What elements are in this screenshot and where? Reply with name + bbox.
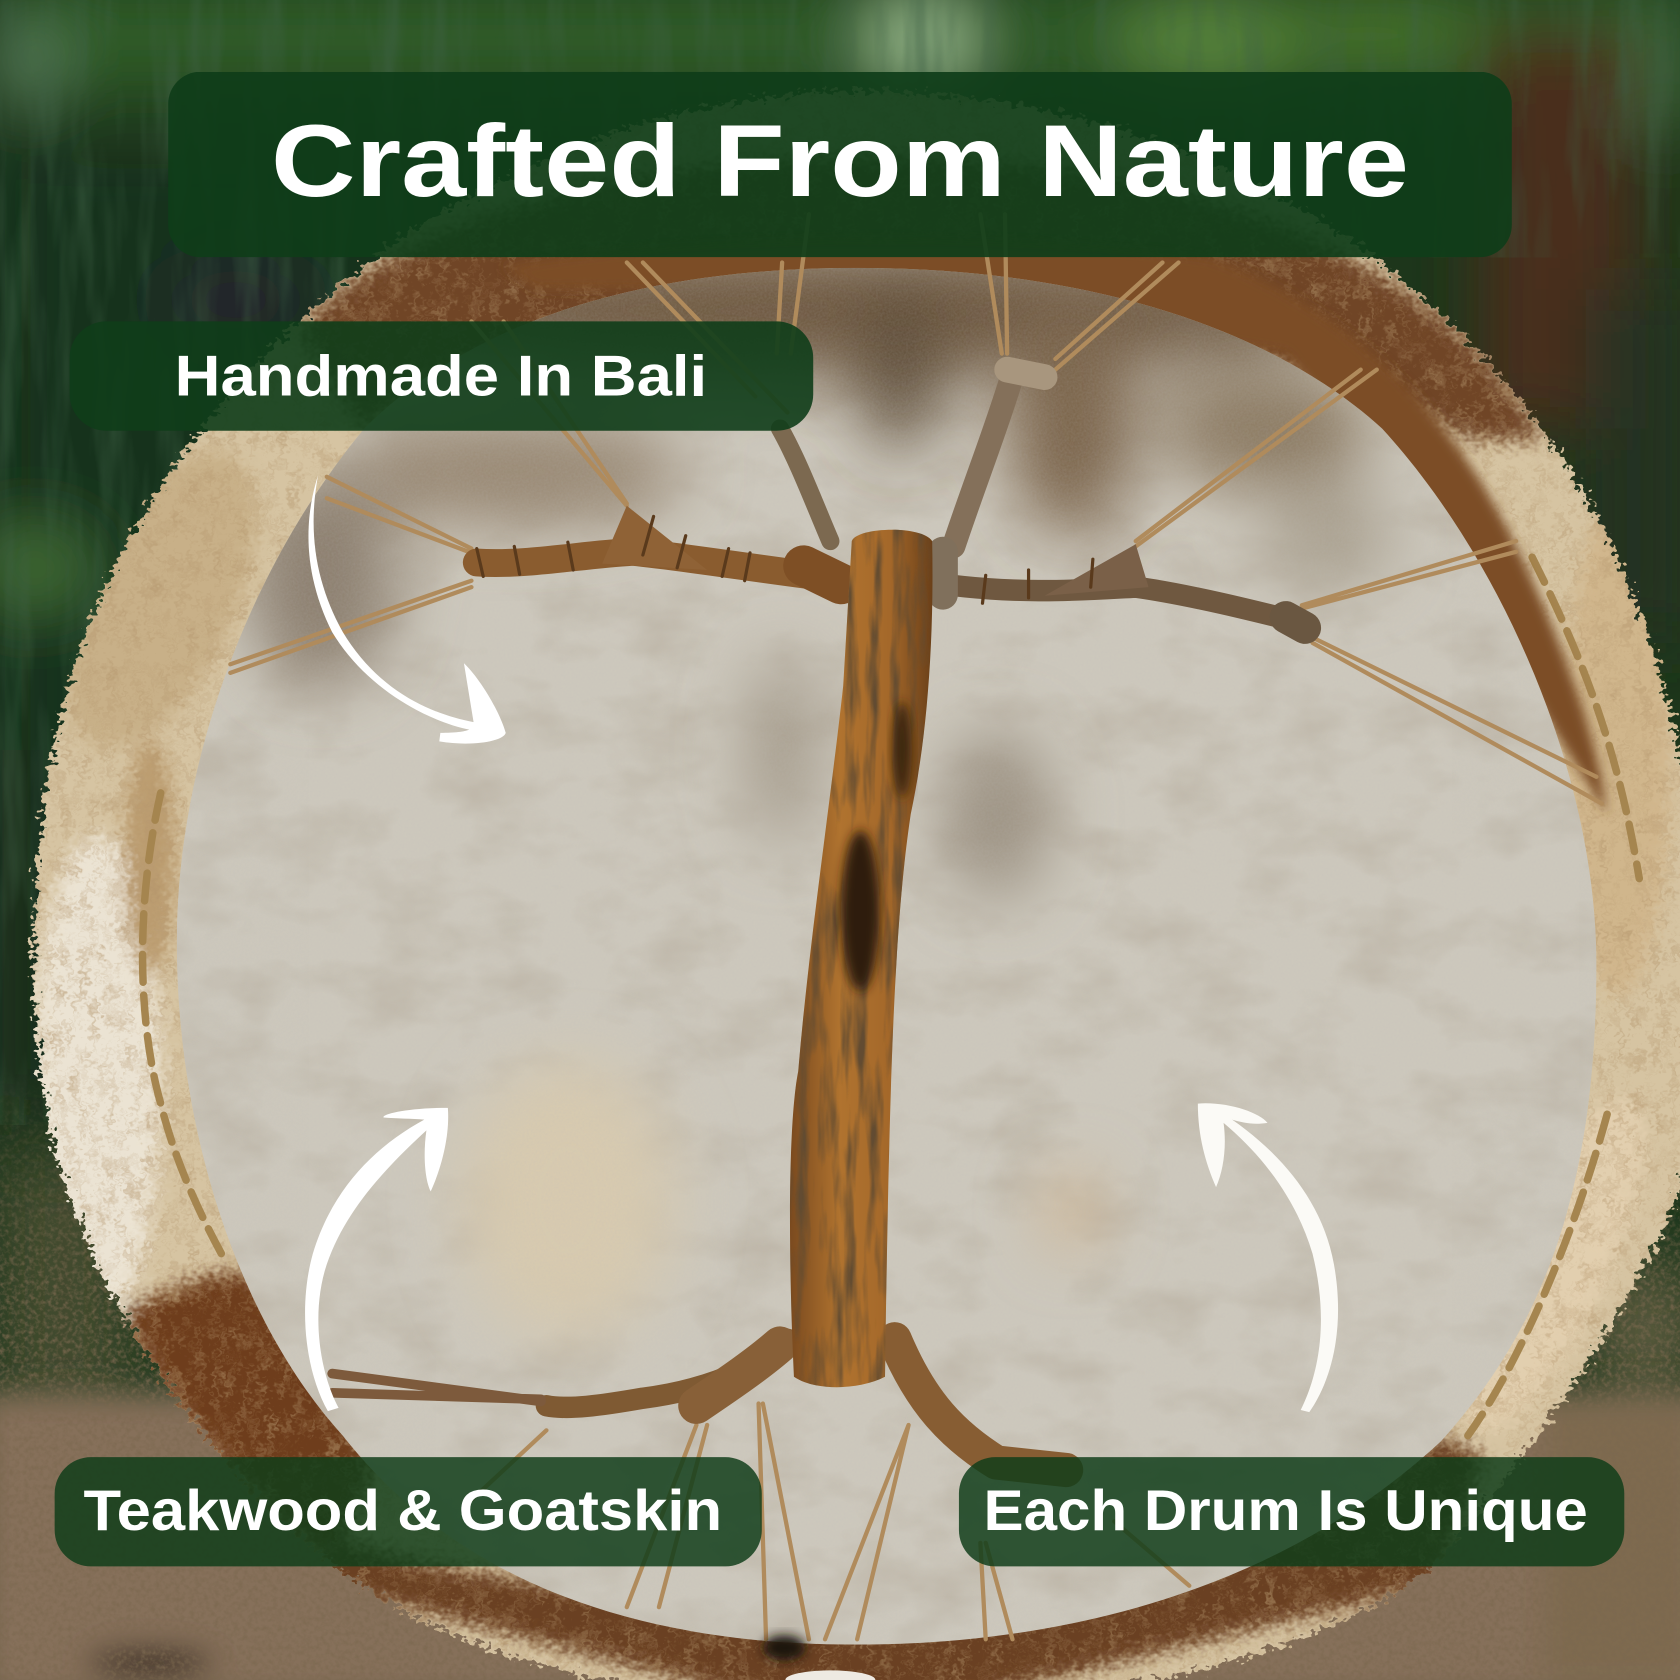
callout: teakwood and goatskin: Teakwood & Goatskin	[84, 1479, 722, 1543]
arrow: unique callout to drum	[1198, 1103, 1338, 1412]
callout: each drum is unique: Each Drum Is Unique	[984, 1479, 1588, 1543]
callout: handmade in Bali: Handmade In Bali	[175, 344, 707, 408]
bottom details: dark tuft and white cloth	[763, 1635, 875, 1680]
title banner	[168, 72, 1512, 257]
arrow: handmade callout to drum	[308, 475, 506, 744]
drum: inner wall	[504, 238, 1607, 814]
title text: Crafted From Nature	[271, 104, 1409, 218]
drum: skin head	[161, 246, 1618, 1661]
callout: teakwood and goatskin	[55, 1457, 762, 1566]
drum: wooden handle	[790, 530, 933, 1387]
drum: wrapped branch frame	[332, 370, 1305, 1470]
drum: lacing strings	[230, 214, 1602, 1639]
callout: handmade in Bali	[70, 321, 813, 431]
callout: each drum is unique	[959, 1457, 1624, 1566]
arrow: teakwood callout to drum	[305, 1108, 448, 1411]
drum: rim stitching	[143, 557, 1639, 1436]
